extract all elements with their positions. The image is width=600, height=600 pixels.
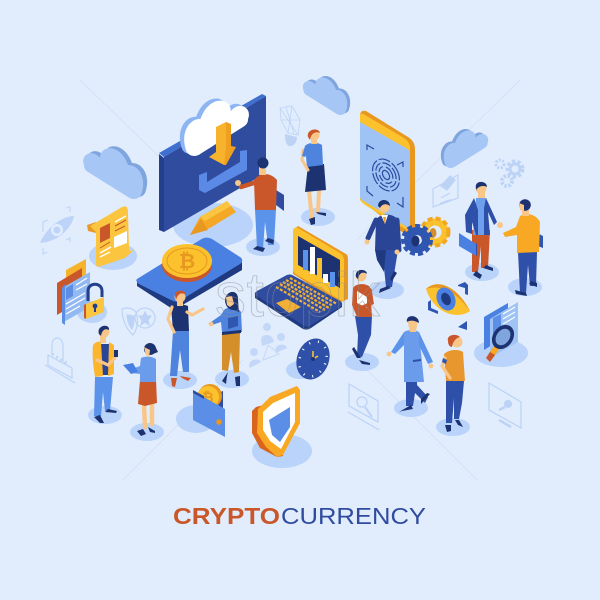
icon: cloud top middle (303, 76, 350, 115)
icon: documents with padlock (57, 259, 107, 325)
icon: clock (286, 334, 335, 384)
person: man in orange sweater (503, 199, 543, 296)
person: man in blue jacket with briefcase (459, 182, 503, 281)
panel: large monitor with cloud download (159, 94, 266, 247)
watermark: stopik (215, 261, 381, 330)
icon: shield (252, 386, 312, 468)
person: woman in red shirt with paper (345, 270, 379, 371)
icon: faded shield and star badges (122, 308, 155, 335)
icon: cloud right (441, 129, 488, 168)
icon: faded people network (249, 323, 287, 368)
icon: white cloud (180, 98, 249, 156)
chart: bars on laptop screen (303, 247, 335, 287)
person: woman with hijab (209, 292, 249, 388)
person: woman in navy top (163, 291, 203, 389)
icon: document with magnifier (474, 302, 528, 367)
keyboard (276, 278, 337, 312)
title: CRYPTO (173, 503, 280, 529)
person: man in navy suit (364, 200, 404, 299)
icon: faded key monitor (489, 383, 521, 428)
icon: gears (403, 218, 448, 254)
person: woman in orange tee (436, 335, 470, 436)
person: doctor in blue coat (387, 316, 433, 417)
icon: bitcoin coin: ₿ (179, 251, 195, 273)
person: man in yellow vest (88, 326, 122, 424)
icon: faded analytics monitor (348, 384, 379, 430)
icon: gold bar (190, 201, 236, 235)
person: woman with tablet (123, 343, 164, 441)
touchpad (276, 299, 301, 313)
icon: fingerprint (367, 145, 405, 207)
icon: cloud left (83, 146, 147, 199)
panel: tall phone with fingerprint (360, 111, 415, 238)
icon: faded eye (40, 207, 74, 254)
panel: laptop (255, 226, 348, 330)
icon: wallet with coin (176, 384, 225, 437)
icon: download tray (199, 150, 247, 193)
icon: wallet with coin: ₿ (202, 389, 214, 405)
icon: faded lock screen (45, 338, 75, 383)
person: man in red sweater (235, 158, 284, 256)
title: CURRENCY (281, 503, 426, 529)
icon: faded download monitor (433, 175, 458, 207)
icon: document scroll (87, 206, 137, 270)
icon: eye with scan corners (426, 282, 470, 330)
icon: faded network balloon (280, 106, 300, 146)
panel: phone with bitcoin coin (136, 238, 242, 310)
icon: faded gears (496, 160, 522, 186)
icon: download arrow (209, 122, 236, 165)
person: woman in blue top and navy skirt (301, 130, 335, 226)
